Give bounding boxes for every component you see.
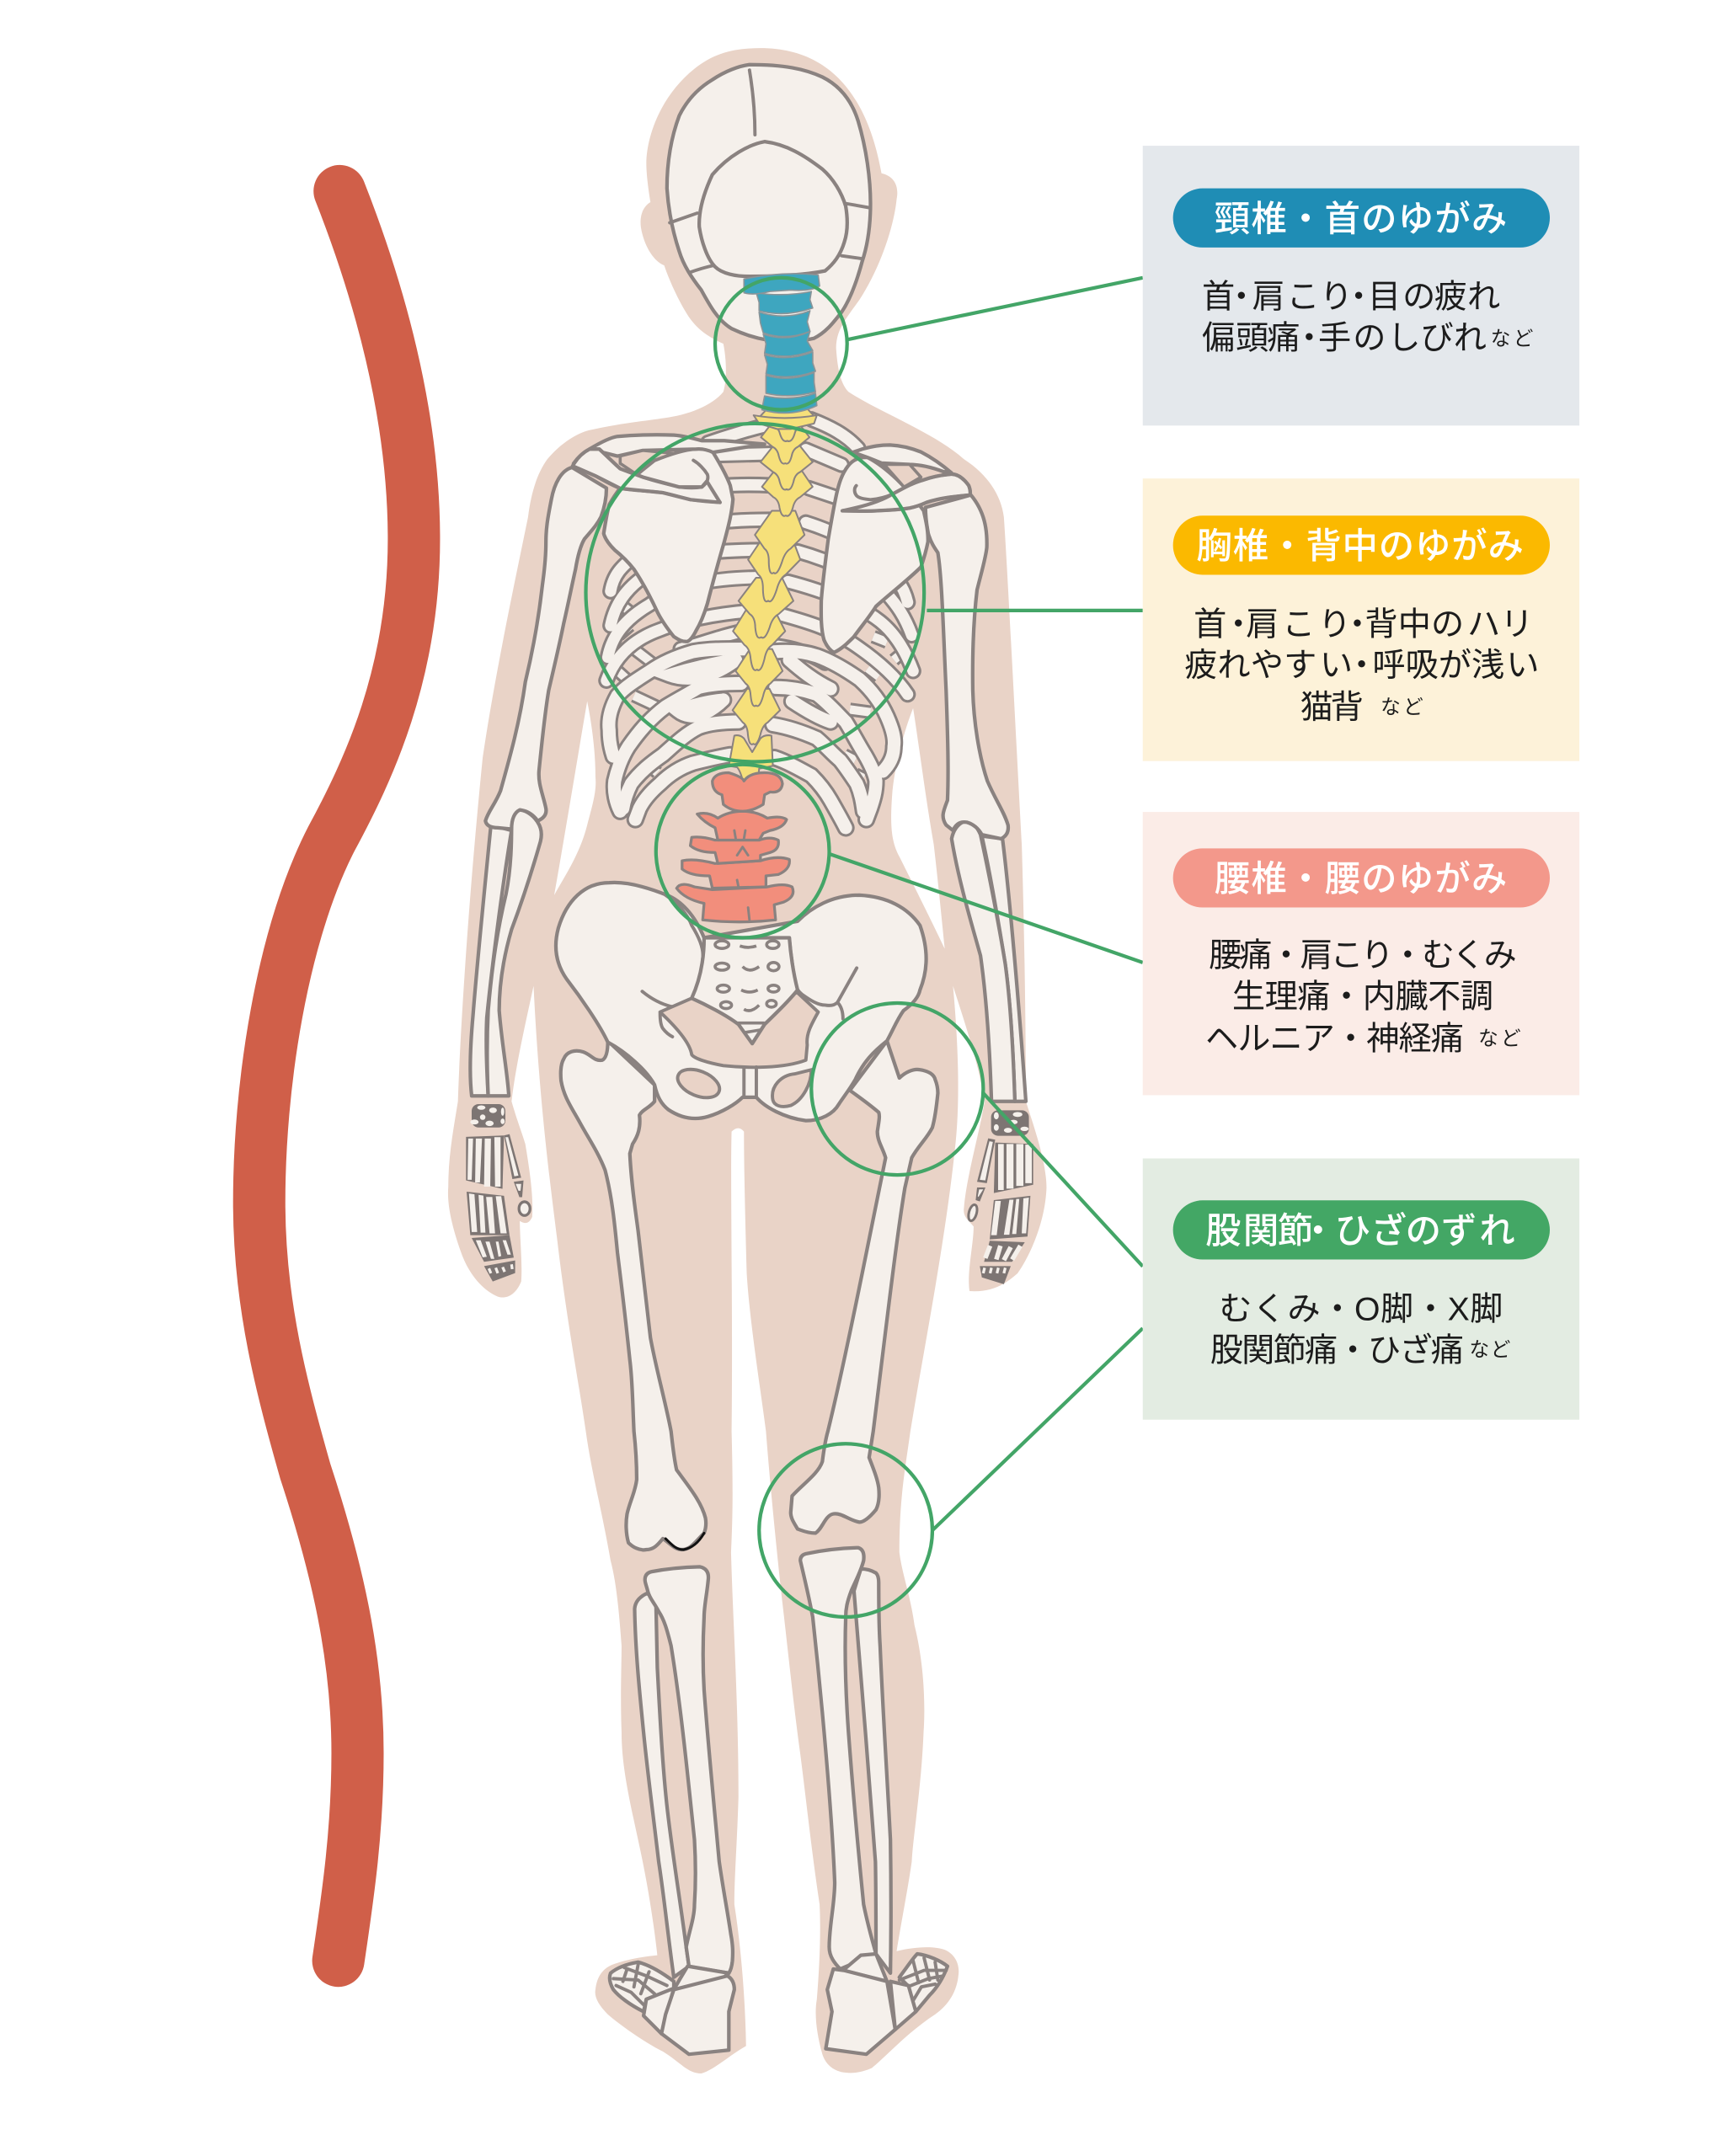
pelvis — [556, 883, 927, 1121]
symptoms: hip: むくみ・O脚・X脚 — [1219, 1291, 1503, 1327]
cervical vertebrae (teal) — [744, 274, 820, 413]
heading pill: neck — [1173, 189, 1550, 248]
circle: neck — [715, 278, 847, 410]
symptoms: back: 疲れやすい・呼吸が浅い — [1184, 648, 1540, 684]
heading pill: waist — [1173, 848, 1550, 908]
panel: thoracic / back — [1143, 478, 1579, 761]
right foot bones — [825, 1954, 948, 2054]
pelvic cavity and obturator holes — [660, 993, 818, 1107]
heading pill: back — [1173, 515, 1550, 574]
rib cage — [606, 419, 913, 828]
sacrum — [692, 937, 798, 1043]
connector: hip — [983, 1093, 1143, 1267]
symptoms: hip: 股関節痛・ひざ痛 — [1210, 1332, 1464, 1369]
symptoms: waist: 生理痛・内臓不調 — [1232, 979, 1493, 1016]
scapula: right — [821, 457, 928, 653]
panel: cervical / neck — [1143, 146, 1579, 425]
right hand bones — [967, 1110, 1033, 1284]
symptoms: hip — [1210, 1291, 1510, 1369]
symptoms: neck: 偏頭痛・手のしびれ — [1202, 321, 1487, 357]
connector: waist — [829, 854, 1143, 963]
right arm bones — [926, 495, 1026, 1102]
left arm bones — [470, 467, 606, 1096]
circle: knee — [759, 1444, 932, 1617]
heading pill: hip: 股関節・ひざのずれ — [1205, 1211, 1515, 1251]
connector: chest — [927, 610, 1143, 611]
circle: chest — [586, 424, 924, 761]
symptoms: waist: 腰痛・肩こり・むくみ — [1209, 938, 1517, 974]
symptoms: neck — [1202, 280, 1533, 357]
heading pill: hip — [1173, 1200, 1550, 1260]
clavicle and shoulder: right — [842, 445, 970, 511]
lumbar vertebrae (salmon) — [676, 773, 793, 922]
left femur — [561, 1041, 706, 1550]
right femur — [791, 1041, 937, 1533]
spine curve: red S line — [259, 191, 414, 1961]
heading pill: neck: 頸椎・首のゆがみ — [1215, 199, 1507, 238]
symptoms: neck: 首・肩こり・目の疲れ — [1202, 280, 1500, 316]
skull — [667, 65, 870, 342]
symptoms: back — [1184, 606, 1540, 726]
left lower leg bones — [634, 1566, 733, 1977]
panel: lumbar / waist — [1143, 812, 1579, 1095]
connector: neck — [847, 278, 1143, 339]
symptoms: waist — [1205, 938, 1521, 1058]
circle: waist — [656, 765, 829, 937]
symptoms: back: 猫背 — [1300, 690, 1364, 726]
symptoms: waist: ヘルニア・神経痛 — [1205, 1022, 1464, 1058]
symptoms: waist: など — [1478, 1028, 1521, 1050]
panel: hip / knee — [1143, 1159, 1579, 1420]
body silhouette — [448, 48, 1046, 2073]
left foot bones — [610, 1962, 734, 2054]
symptoms: back: 首・肩こり・背中のハリ — [1194, 606, 1533, 643]
left hand bones — [466, 1104, 530, 1282]
symptoms: back: など — [1381, 696, 1423, 718]
heading pill: back: 胸椎・背中のゆがみ — [1196, 526, 1524, 566]
symptoms: hip: など — [1469, 1340, 1510, 1362]
symptoms: neck: など — [1491, 328, 1533, 350]
thoracic vertebrae (yellow) — [729, 401, 817, 780]
scapula: left — [604, 449, 733, 642]
clavicle and shoulder: left — [573, 435, 765, 503]
right lower leg bones — [800, 1548, 891, 1973]
highlight circles and connector lines — [586, 278, 1143, 1617]
connector: knee — [932, 1328, 1143, 1530]
heading pill: waist: 腰椎・腰のゆがみ — [1215, 859, 1507, 899]
circle: hip — [811, 1003, 983, 1175]
